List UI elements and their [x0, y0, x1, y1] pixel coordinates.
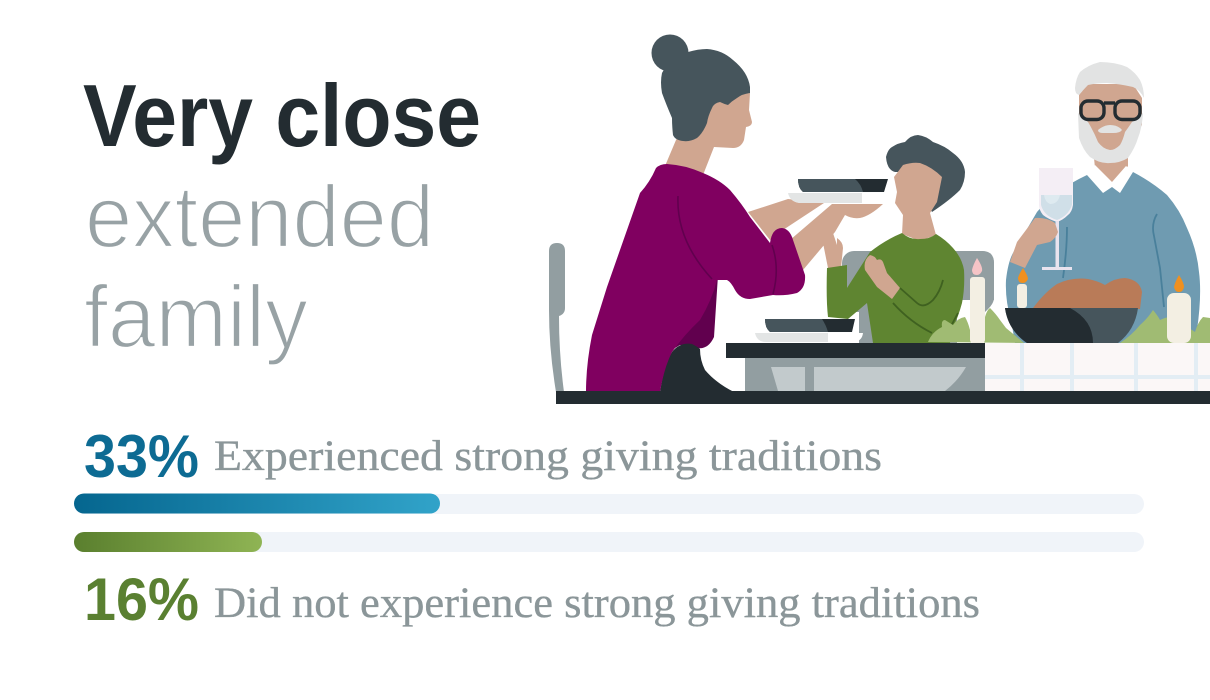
label: Did not experience strong giving traditions	[214, 580, 980, 627]
title: family	[84, 267, 308, 366]
candles	[970, 258, 1191, 343]
figure: grandfather	[1006, 62, 1200, 343]
collar	[1087, 165, 1133, 193]
glasses	[1081, 101, 1140, 120]
neck and face	[665, 93, 752, 175]
floor bar	[556, 391, 1210, 404]
bar: 33 percent	[74, 494, 1144, 514]
number: 16%	[84, 566, 199, 633]
chair behind child	[828, 251, 997, 344]
dark inner shirt	[655, 275, 718, 360]
face	[1079, 84, 1142, 150]
sweater seam lines	[678, 196, 776, 294]
hair	[661, 49, 750, 141]
figure: woman	[586, 34, 883, 392]
icon: left chair	[549, 243, 565, 392]
number: 33%	[84, 423, 199, 490]
sweater lines	[1063, 214, 1164, 307]
table base	[745, 358, 986, 391]
plate and bowl on table	[755, 319, 863, 342]
face and neck	[894, 163, 942, 241]
title: Very close	[83, 66, 481, 165]
title: extended	[85, 167, 434, 266]
figure: child	[823, 135, 965, 343]
wine glass	[1039, 168, 1073, 270]
serving dish held by woman	[788, 179, 888, 203]
sleeve lines	[893, 280, 958, 333]
beard	[1078, 113, 1143, 163]
pants	[660, 344, 734, 392]
dark tabletop	[726, 343, 985, 358]
hair	[886, 135, 965, 212]
serving bowl	[1005, 308, 1138, 343]
sweater	[827, 233, 964, 343]
tablecloth	[985, 343, 1210, 391]
title	[83, 66, 481, 366]
sweater	[586, 164, 805, 392]
bar: 16 percent	[74, 532, 1144, 552]
stat: 33 percent	[84, 423, 882, 490]
sweater	[1006, 172, 1200, 343]
back arm	[748, 199, 824, 240]
moustache	[1098, 125, 1122, 133]
turkey	[1033, 278, 1142, 309]
hand	[1010, 218, 1058, 268]
child's hand	[865, 255, 900, 299]
hair	[1075, 62, 1144, 98]
neck	[1094, 158, 1128, 186]
illustration: family dinner	[549, 34, 1210, 404]
front arm	[790, 204, 883, 270]
label: Experienced strong giving traditions	[214, 433, 882, 480]
greenery	[928, 308, 1210, 343]
raised hand	[823, 233, 843, 268]
stat: 16 percent	[84, 566, 980, 633]
